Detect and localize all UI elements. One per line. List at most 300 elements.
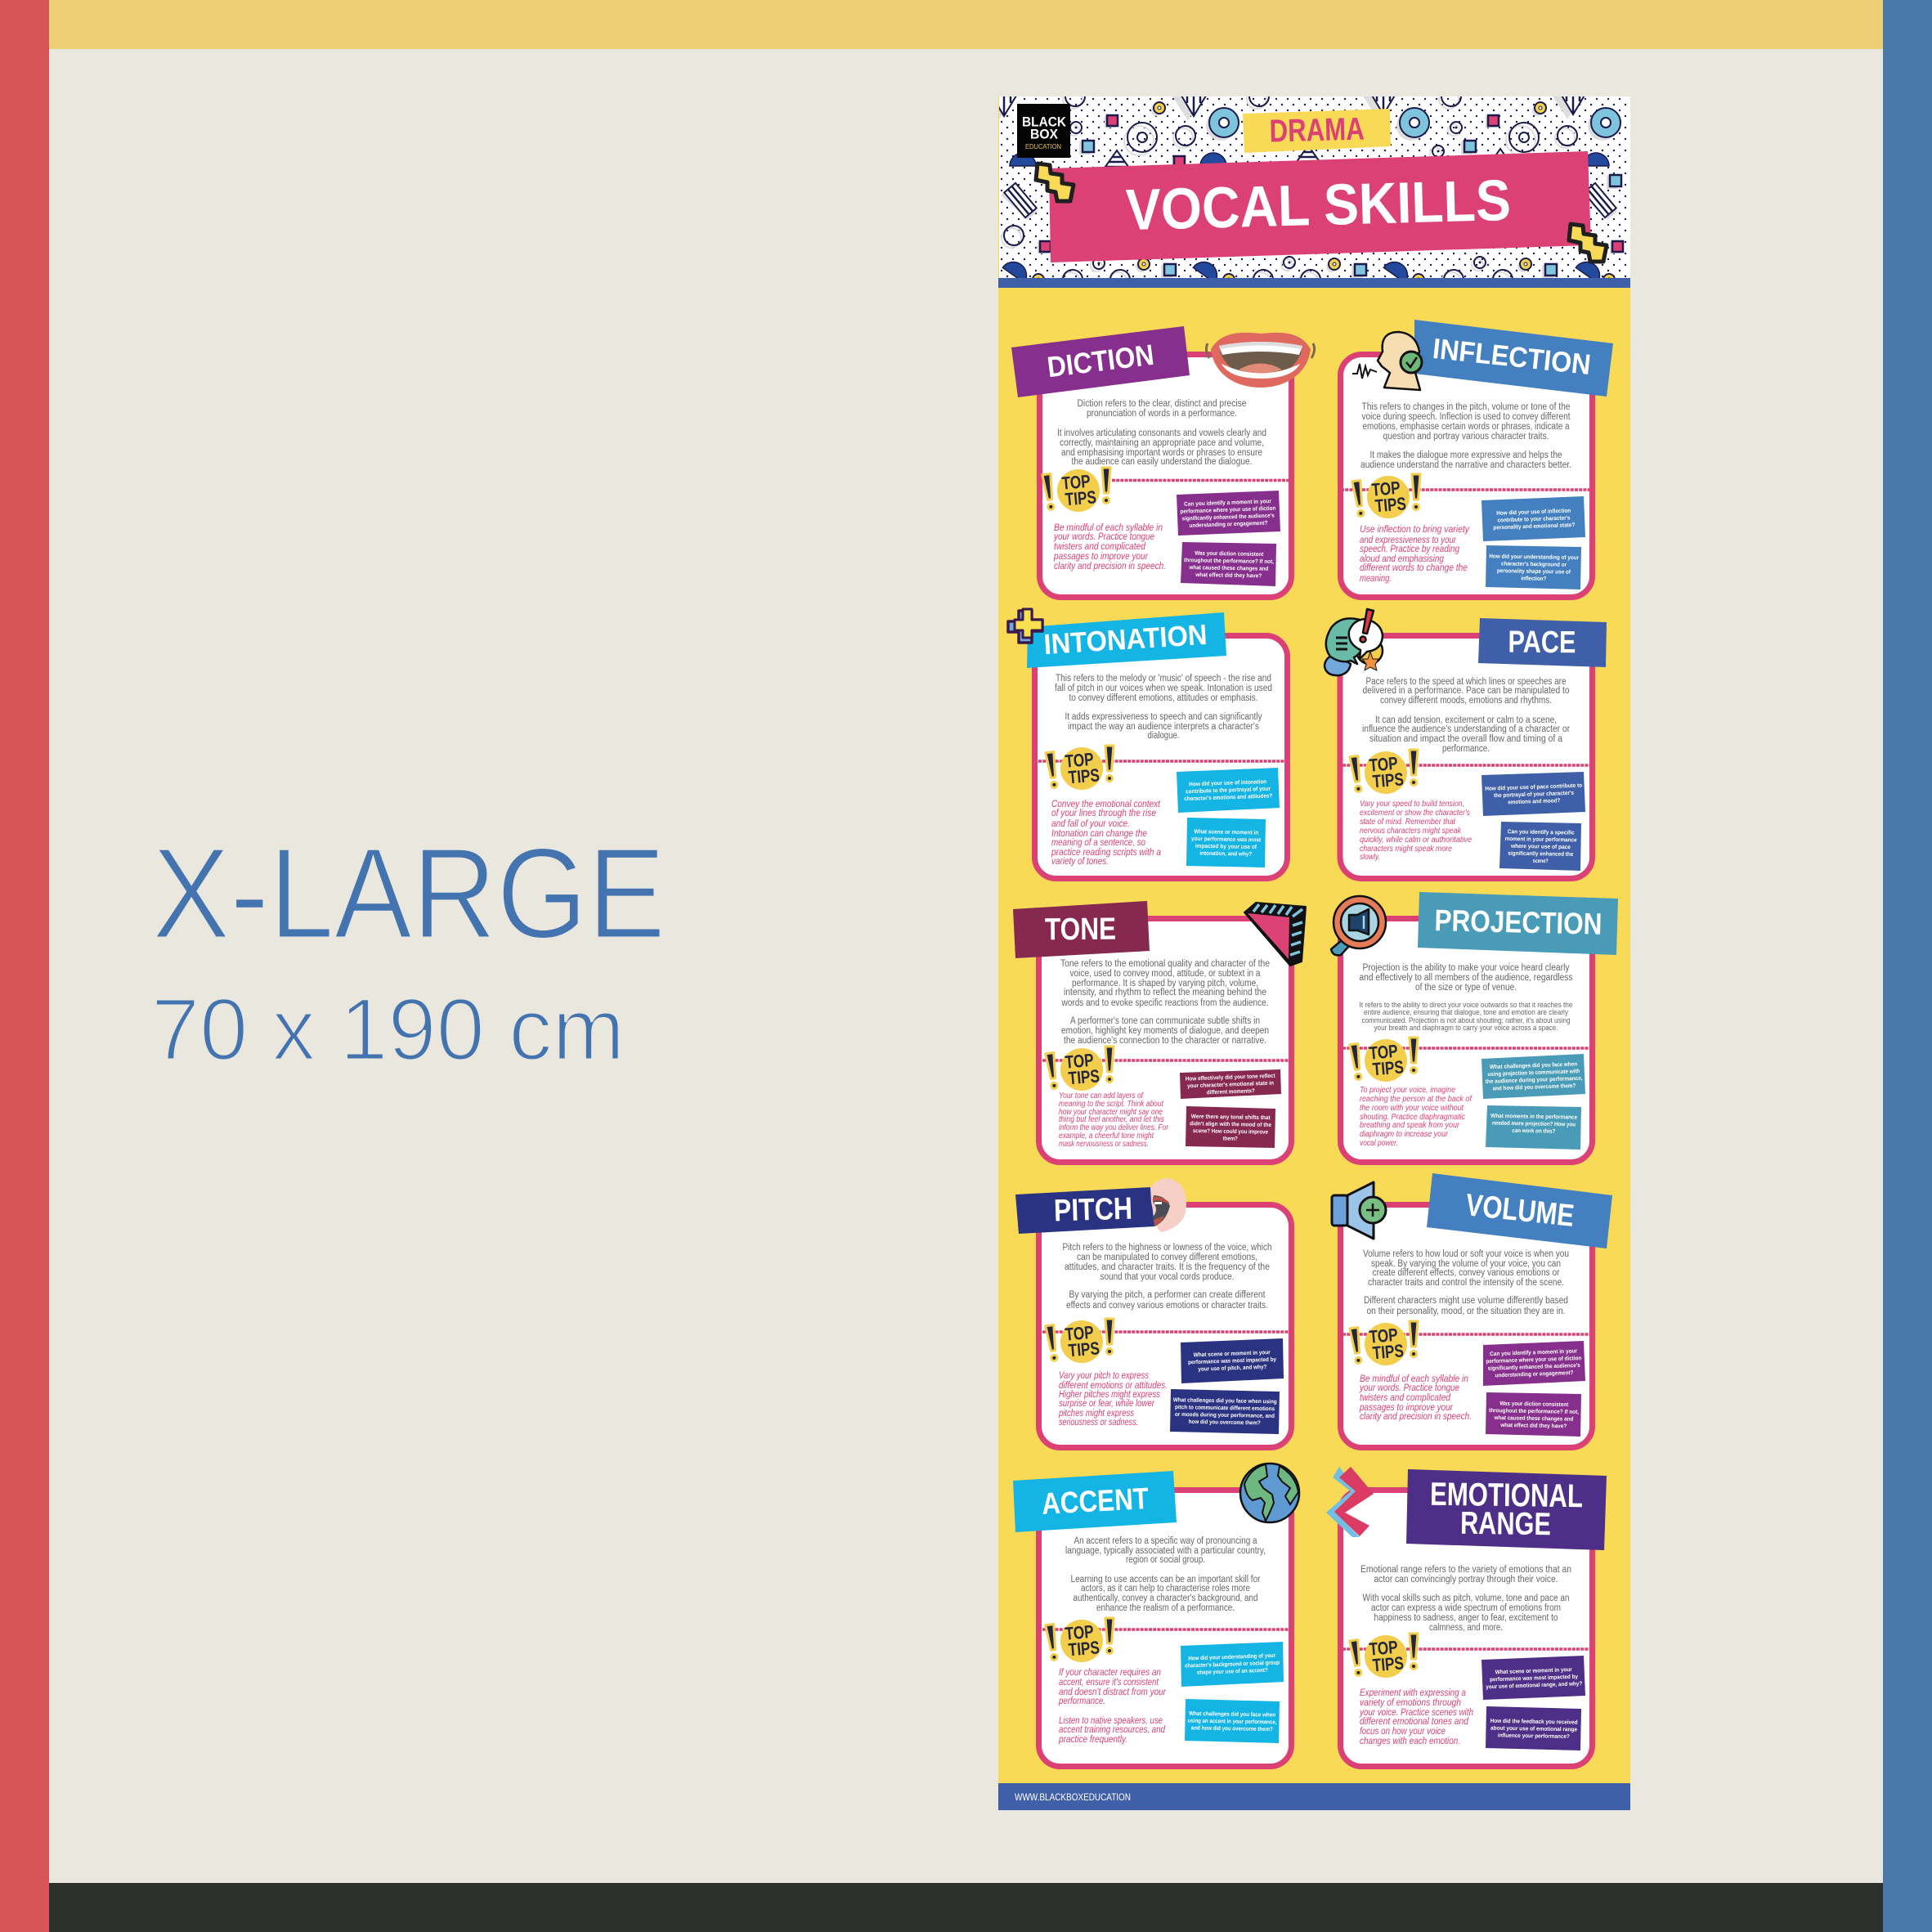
tip text: Use inflection to bring variety — [1360, 525, 1470, 535]
top tips badge — [1352, 474, 1420, 518]
body text: can be manipulated to convey different emotions, — [1077, 1253, 1257, 1262]
body text: communicated. Projection is not about shouting; rather, it's about using — [1362, 1016, 1570, 1025]
tip text: thing but feel another, and let this — [1059, 1115, 1164, 1124]
question box 2: what caused these changes and — [1493, 1415, 1573, 1423]
body text: emotions, emphasise certain words or phrases, indicate a — [1362, 422, 1570, 432]
tip text — [1059, 1092, 1169, 1149]
icon: open mouth profile — [1150, 1178, 1186, 1232]
question box 1: significantly enhanced the audience's — [1488, 1363, 1580, 1372]
tip text: Be mindful of each syllable in — [1054, 523, 1163, 533]
tip text: focus on how your voice — [1360, 1727, 1446, 1737]
question box 2: Was your diction consistent — [1195, 551, 1264, 558]
question box 2: can work on this? — [1512, 1128, 1555, 1135]
question box 2 — [1486, 1706, 1581, 1750]
question box 2: influence your performance? — [1498, 1733, 1570, 1740]
tip text: of your lines through the rise — [1051, 809, 1156, 818]
tip text: performance. — [1058, 1697, 1105, 1706]
tip text: Convey the emotional context — [1051, 800, 1161, 809]
body text — [1360, 1565, 1571, 1633]
heading tab: DICTION — [1046, 338, 1156, 383]
frame: bottom dark band — [49, 1883, 1883, 1932]
tip text: different words to change the — [1360, 563, 1468, 573]
tip text: speech. Practice by reading — [1360, 545, 1460, 554]
question box 2: about your use of emotional range — [1490, 1726, 1577, 1733]
icon: magnifier with speaker — [1331, 896, 1386, 955]
top tips badge: TOP — [1065, 749, 1095, 772]
icon: chevrons — [1326, 1467, 1374, 1537]
body text: Volume refers to how loud or soft your voice is when you — [1363, 1249, 1569, 1259]
heading tab: VOLUME — [1464, 1188, 1576, 1234]
body text: By varying the pitch, a performer can create different — [1069, 1290, 1266, 1300]
body text — [1057, 399, 1266, 467]
heading: X-LARGE: X-LARGE — [152, 822, 666, 966]
tip text: Intonation can change the — [1051, 829, 1147, 839]
question box 2: intonation, and why? — [1199, 851, 1252, 858]
tip text: changes with each emotion. — [1360, 1737, 1460, 1746]
question box 2: How did your understanding of your — [1489, 554, 1580, 561]
tip text — [1360, 525, 1470, 584]
question box 2 — [1170, 1389, 1280, 1434]
body text: This refers to the melody or 'music' of speech - the rise and — [1056, 674, 1271, 684]
body text: speak. By varying the volume of your voice, you can — [1371, 1259, 1561, 1269]
icon: triangle — [1244, 903, 1306, 966]
heading tab: ACCENT — [1041, 1481, 1150, 1521]
top tips badge — [1046, 746, 1114, 790]
tip text: reaching the person at the back of — [1360, 1095, 1473, 1104]
tip text: aloud and emphasising — [1360, 554, 1445, 564]
question box 1: What scene or moment in your — [1194, 1350, 1271, 1358]
tip text: and expressiveness to your — [1360, 536, 1457, 545]
tip text: accent, ensure it's consistent — [1059, 1678, 1159, 1688]
question box 2: impacted by your use of — [1195, 844, 1257, 850]
question box 1: Can you identify a moment in your — [1490, 1348, 1577, 1357]
body text: on their personality, mood, or the situation they are in. — [1367, 1307, 1565, 1316]
frame: right blue band — [1883, 0, 1932, 1932]
panel: projection — [1331, 892, 1618, 1163]
tip text: quickly, while calm or authoritative — [1360, 836, 1472, 845]
footer bar — [998, 1783, 1630, 1810]
body text: enhance the realism of a performance. — [1096, 1603, 1235, 1613]
question box 1: understanding or engagement? — [1189, 521, 1268, 529]
icon: plus — [1008, 609, 1042, 643]
top tips badge: TIPS — [1068, 1338, 1100, 1360]
logo: BOX — [1030, 128, 1058, 142]
body text: It adds expressiveness to speech and can significantly — [1065, 712, 1262, 722]
body text: influence the audience's understanding of a character or — [1362, 724, 1570, 734]
question box 1: understanding or engagement? — [1495, 1370, 1574, 1378]
question box 2: inflection? — [1521, 576, 1546, 582]
question box 1: What scene or moment in your — [1495, 1667, 1572, 1675]
heading tab: RANGE — [1460, 1506, 1551, 1542]
tip text: Higher pitches might express — [1059, 1390, 1160, 1400]
body text: to convey different emotions, attitudes or emphasis. — [1069, 693, 1257, 703]
body text: the audience's connection to the character or narrative. — [1064, 1036, 1266, 1046]
body text: intensity, and rhythm to reflect the meaning behind the — [1064, 988, 1266, 997]
body text — [1363, 1249, 1569, 1316]
heading tab — [1013, 901, 1150, 958]
tip text: slowly. — [1360, 853, 1380, 862]
question box 2: What moments in the performance — [1490, 1114, 1577, 1121]
body text — [1359, 963, 1573, 1033]
body text — [1060, 959, 1270, 1046]
body text: It refers to the ability to direct your voice outwards so that it reaches the — [1359, 1001, 1573, 1010]
question box 1: How did your use of intonation — [1189, 779, 1266, 787]
body text: language, typically associated with a particular country, — [1065, 1546, 1266, 1556]
body text: actors, as it can help to characterise roles more — [1081, 1584, 1250, 1594]
question box 1: character's emotions and attitudes? — [1184, 793, 1272, 802]
panel: diction — [1011, 326, 1315, 597]
top tips badge: TIPS — [1065, 486, 1097, 509]
body text: Emotional range refers to the variety of emotions that an — [1360, 1565, 1571, 1575]
question box 1 — [1481, 1054, 1585, 1099]
question box 1: using projection to communicate with — [1487, 1069, 1580, 1078]
tip text: Your tone can add layers of — [1059, 1092, 1144, 1100]
poster yellow background — [998, 96, 1630, 1810]
top tips badge: TOP — [1061, 471, 1092, 494]
body text: Different characters might use volume differently based — [1364, 1296, 1568, 1306]
question box 1: performance was most impacted by — [1490, 1674, 1578, 1683]
body text: and emphasising important words or phrases to ensure — [1061, 448, 1262, 458]
tip text — [1359, 1374, 1472, 1422]
top tips badge: TOP — [1369, 753, 1399, 776]
tip text: variety of emotions through — [1360, 1698, 1461, 1708]
question box 2: scene? — [1533, 858, 1549, 864]
top tips badge: TIPS — [1372, 1340, 1405, 1363]
heading tab: TONE — [1045, 912, 1116, 947]
heading tab — [1414, 320, 1613, 397]
header bottom blue strip — [998, 278, 1630, 288]
question box 1: and how did you overcome them? — [1492, 1083, 1576, 1092]
heading tab — [1011, 326, 1190, 397]
heading tab: PROJECTION — [1434, 903, 1603, 941]
question box 2: or moods during your performance, and — [1175, 1412, 1275, 1419]
tip text: Vary your pitch to express — [1059, 1371, 1149, 1381]
question box 2: character's background or — [1501, 561, 1567, 568]
icon: lightning bolt right — [1569, 224, 1607, 262]
body text: With vocal skills such as pitch, volume, tone and pace an — [1362, 1594, 1570, 1603]
heading tab: INTONATION — [1043, 619, 1208, 661]
tip text: vocal power. — [1360, 1139, 1398, 1148]
tip text — [1053, 523, 1166, 572]
top tips badge — [1350, 1634, 1418, 1678]
question box 2: throughout the performance? If not, — [1489, 1408, 1579, 1415]
tip text: mask nervousness or sadness. — [1059, 1140, 1149, 1149]
question box 2: Can you identify a specific — [1508, 829, 1575, 836]
question box 2: didn't align with the mood of the — [1190, 1121, 1271, 1128]
top tips badge: TOP — [1369, 1325, 1399, 1347]
panel: volume — [1332, 1173, 1612, 1447]
question box 1: What challenges did you face when — [1490, 1061, 1577, 1070]
body text — [1065, 1536, 1266, 1613]
question box 1: performance where your use of diction — [1486, 1356, 1581, 1365]
tip text: state of mind. Remember that — [1360, 818, 1456, 827]
question box 1: the portrayal of your character's — [1494, 791, 1574, 799]
question box 1 — [1181, 1338, 1284, 1383]
question box 2: them? — [1223, 1136, 1238, 1142]
heading tab — [1015, 1187, 1154, 1234]
body text: region or social group. — [1126, 1555, 1205, 1565]
question box 2: significantly enhanced the — [1508, 851, 1573, 858]
body text: Learning to use accents can be an important skill for — [1071, 1575, 1261, 1585]
question box 1 — [1481, 1656, 1585, 1700]
top tips badge — [1350, 750, 1418, 794]
heading tab — [1427, 1173, 1612, 1248]
tip text: To project your voice, imagine — [1360, 1086, 1455, 1095]
top tips badge: TIPS — [1372, 769, 1405, 791]
logo: BLACK — [1022, 114, 1066, 129]
tip text: different emotions or attitudes. — [1059, 1381, 1168, 1391]
heading tab — [1013, 1471, 1177, 1532]
top tips badge: TOP — [1369, 1041, 1399, 1064]
tip text: your voice. Practice scenes with — [1359, 1708, 1473, 1718]
body text: Projection is the ability to make your voice heard clearly — [1362, 963, 1570, 973]
question box 1: performance where your use of diction — [1180, 506, 1275, 515]
question box 1: your character's emotional state in — [1187, 1081, 1274, 1089]
logo — [1017, 104, 1070, 158]
panel: inflection — [1341, 320, 1613, 597]
top tips badge: TIPS — [1374, 493, 1407, 516]
heading tab: PACE — [1508, 625, 1576, 660]
question box 1: performance was most impacted by — [1188, 1357, 1276, 1365]
question box 1: How did your use of inflection — [1496, 509, 1571, 517]
subject label: drama: DRAMA — [1269, 111, 1365, 150]
question box 1: contribute to the portrayal of your — [1186, 787, 1271, 795]
poster — [982, 87, 1630, 1810]
tip text: passages to improve your — [1359, 1403, 1454, 1413]
heading tab: INFLECTION — [1431, 333, 1592, 381]
tip text: nervous characters might speak — [1360, 827, 1462, 836]
body text: actor can express a wide spectrum of emotions from — [1371, 1603, 1561, 1613]
question box 2: How did the feedback you received — [1490, 1719, 1578, 1726]
heading tab — [1478, 618, 1607, 667]
tip text: meaning of a sentence, so — [1051, 838, 1146, 848]
body text — [1362, 677, 1570, 754]
header pattern — [999, 96, 1630, 278]
tip text — [1051, 800, 1161, 867]
heading tab: PITCH — [1053, 1192, 1133, 1228]
body text: character traits and control the intensity of the scene. — [1368, 1278, 1564, 1288]
size label — [151, 822, 666, 1078]
body text: delivered in a performance. Pace can be manipulated to — [1362, 686, 1570, 696]
question box 2: and how did you overcome them? — [1191, 1725, 1273, 1733]
tip text: excitement or show the character's — [1360, 809, 1470, 818]
question box 1 — [1177, 768, 1280, 813]
question box 1 — [1181, 1642, 1284, 1687]
heading tab — [1406, 1469, 1607, 1550]
question box 1: shape your use of an accent? — [1197, 1668, 1268, 1676]
body text: Pitch refers to the highness or lowness of the voice, which — [1063, 1243, 1272, 1253]
top tips badge: TIPS — [1372, 1056, 1405, 1079]
body text: A performer's tone can communicate subtle shifts in — [1070, 1016, 1260, 1026]
icon: lightning bolt left — [1036, 164, 1074, 201]
tip text: twisters and complicated — [1054, 542, 1146, 552]
question box 2: what effect did they have? — [1195, 572, 1262, 579]
body text: actor can convincingly portray through their voice. — [1374, 1575, 1558, 1585]
body text: attitudes, and character traits. It is the frequency of the — [1065, 1262, 1270, 1272]
tip text: inform the way you deliver lines. For — [1059, 1123, 1169, 1132]
tip text: meaning to the script. Think about — [1059, 1100, 1164, 1109]
question box 1: the audience during your performance, — [1486, 1076, 1583, 1085]
question box 2: moment in your performance — [1505, 836, 1577, 843]
tip text: meaning. — [1360, 574, 1392, 584]
icon: speech bubbles — [1325, 609, 1383, 675]
question box 1 — [1481, 772, 1585, 816]
body text: Tone refers to the emotional quality and character of the — [1060, 959, 1270, 969]
body text: authentically, convey a character's background, and — [1073, 1594, 1257, 1603]
question box 2 — [1186, 1106, 1275, 1148]
body text: happiness to sadness, anger to fear, excitement to — [1374, 1613, 1558, 1623]
body text: emotion, highlight key moments of dialogue, and deepen — [1061, 1026, 1269, 1036]
tip text: Listen to native speakers, use — [1059, 1716, 1163, 1726]
question box 1: your use of emotional range, and why? — [1486, 1681, 1582, 1690]
tip text: your words. Practice tongue — [1053, 532, 1154, 542]
body text: An accent refers to a specific way of pronouncing a — [1074, 1536, 1257, 1546]
question box 1: emotions and mood? — [1508, 798, 1560, 805]
question box 2: throughout the performance? If not, — [1184, 558, 1274, 565]
body text: your breath and diaphragm to carry your voice across a space. — [1374, 1024, 1558, 1033]
question box 1: personality and emotional state? — [1493, 522, 1575, 531]
body text: words and to evoke specific reactions from the audience. — [1061, 998, 1269, 1008]
tip text — [1360, 800, 1472, 862]
icon: mouth — [1206, 333, 1315, 388]
body text — [1055, 674, 1272, 741]
question box 2: scene? How could you improve — [1193, 1128, 1268, 1136]
tip text: breathing and speak from your — [1360, 1121, 1460, 1130]
tip text: different emotional tones and — [1360, 1717, 1469, 1727]
tip text: and fall of your voice. — [1051, 819, 1130, 829]
body text: It involves articulating consonants and vowels clearly and — [1057, 428, 1266, 438]
tip text: Be mindful of each syllable in — [1360, 1374, 1468, 1384]
top tips badge — [1350, 1038, 1418, 1082]
tip text: Vary your speed to build tension, — [1360, 800, 1464, 809]
title banner: VOCAL SKILLS — [1125, 168, 1512, 243]
body text: the audience can easily understand the dialogue. — [1071, 457, 1253, 467]
poster header — [982, 87, 1630, 292]
body text: and effectively to all members of the audience, regardless — [1359, 973, 1573, 983]
question box 2 — [1486, 1105, 1581, 1150]
question box 2: Were there any tonal shifts that — [1191, 1114, 1271, 1121]
icon: globe — [1240, 1464, 1299, 1522]
body text: situation and impact the overall flow and timing of a — [1369, 734, 1563, 744]
top tips badge: TOP — [1065, 1322, 1095, 1345]
body text: voice, used to convey mood, attitude, or subtext in a — [1069, 969, 1261, 979]
tip text: clarity and precision in speech. — [1360, 1412, 1472, 1422]
top tips badge — [1042, 468, 1110, 512]
question box 1: How effectively did your tone reflect — [1186, 1074, 1275, 1083]
question box 2 — [1181, 542, 1276, 586]
question box 2 — [1499, 822, 1581, 871]
top tips badge — [1046, 1319, 1114, 1363]
body text: effects and convey various emotions or character traits. — [1066, 1301, 1268, 1311]
question box 1: contribute to your character's — [1497, 515, 1571, 524]
question box 2 — [1486, 1392, 1581, 1437]
question box 1 — [1481, 496, 1585, 541]
tip text — [1058, 1668, 1167, 1745]
body text: performance. It is shaped by varying pitch, volume, — [1072, 979, 1258, 988]
tip text: practice frequently. — [1058, 1735, 1127, 1745]
top tips badge: TIPS — [1068, 1065, 1100, 1088]
question box 1: significantly enhanced the audience's — [1182, 513, 1275, 522]
tip text: passages to improve your — [1053, 552, 1149, 562]
body text: It makes the dialogue more expressive and helps the — [1370, 451, 1562, 460]
footer bar: WWW.BLACKBOXEDUCATION — [1015, 1791, 1131, 1803]
body text: Pace refers to the speed at which lines or speeches are — [1365, 677, 1567, 687]
top tips badge: TOP — [1065, 1621, 1095, 1644]
question box 1: Can you identify a moment in your — [1184, 499, 1271, 508]
panel: accent — [1013, 1464, 1299, 1766]
panel: pace — [1325, 609, 1607, 878]
question box 1: How did your use of pace contribute to — [1485, 783, 1582, 792]
subject label: drama — [1243, 109, 1391, 153]
body text: sound that your vocal cords produce. — [1100, 1272, 1235, 1282]
panel: intonation — [1008, 609, 1287, 878]
icon: head with headset — [1352, 332, 1422, 390]
question box 2 — [1486, 545, 1581, 589]
heading tab: EMOTIONAL — [1430, 1477, 1583, 1514]
body text: impact the way an audience interprets a character's — [1068, 722, 1259, 732]
tip text: characters might speak more — [1360, 845, 1452, 854]
question box 2: needed more projection? How you — [1492, 1121, 1576, 1127]
question box 2: how did you overcome them? — [1189, 1419, 1261, 1426]
tip text: shouting. Practice diaphragmatic — [1360, 1113, 1465, 1122]
top tips badge: TIPS — [1068, 1637, 1100, 1660]
tip text — [1058, 1371, 1168, 1428]
heading tab — [1027, 612, 1226, 668]
heading tab — [1418, 892, 1618, 955]
question box 2 — [1186, 818, 1266, 867]
dimensions: 70 x 190 cm — [151, 979, 625, 1078]
icon: speaker with plus — [1332, 1182, 1386, 1239]
frame: top yellow band — [49, 0, 1883, 49]
question box 2: personality shape your use of — [1497, 568, 1571, 576]
body text: create different effects, convey various emotions or — [1372, 1268, 1560, 1278]
question box 1: different moments? — [1207, 1088, 1255, 1096]
question box 2: where your use of pace — [1510, 844, 1571, 850]
body text: It can add tension, excitement or calm to a scene, — [1375, 715, 1557, 725]
body text: entire audience, ensuring that dialogue, tone and emotion are clearly — [1364, 1008, 1568, 1017]
question box 2: What scene or moment in — [1194, 829, 1258, 836]
top tips badge — [1350, 1321, 1418, 1365]
body text: performance. — [1442, 744, 1490, 754]
question box 2: What challenges did you face when — [1189, 1711, 1275, 1719]
tip text: surprise or fear, while lower — [1059, 1399, 1155, 1409]
tip text: clarity and precision in speech. — [1054, 562, 1166, 572]
top tips badge — [1046, 1618, 1114, 1662]
top tips badge: TIPS — [1068, 764, 1100, 787]
tip text: example, a cheerful tone might — [1059, 1132, 1154, 1141]
tip text: accent training resources, and — [1059, 1725, 1166, 1735]
tip text — [1359, 1688, 1473, 1746]
logo: EDUCATION — [1025, 143, 1061, 150]
question box 2: using an accent in your performance, — [1187, 1719, 1277, 1725]
tip text — [1360, 1086, 1473, 1148]
body text: This refers to changes in the pitch, volume or tone of the — [1362, 402, 1570, 412]
question box 1 — [1483, 1341, 1585, 1386]
body text: dialogue. — [1148, 731, 1179, 741]
question box 2: your performance was most — [1191, 836, 1262, 843]
tip text: pitches might express — [1058, 1409, 1134, 1419]
frame: left red band — [0, 0, 49, 1932]
tip text: the room with your voice without — [1360, 1104, 1464, 1113]
tip text: practice reading scripts with a — [1051, 848, 1161, 858]
body text: convey different moods, emotions and rhythms. — [1380, 696, 1552, 706]
tip text: seriousness or sadness. — [1059, 1418, 1138, 1428]
tip text: diaphragm to increase your — [1360, 1130, 1449, 1139]
tip text: If your character requires an — [1059, 1668, 1161, 1678]
body text: Diction refers to the clear, distinct and precise — [1078, 399, 1246, 409]
body text: voice during speech. Inflection is used to convey different — [1362, 412, 1571, 422]
body text: fall of pitch in our voices when we speak. Intonation is used — [1055, 684, 1272, 693]
